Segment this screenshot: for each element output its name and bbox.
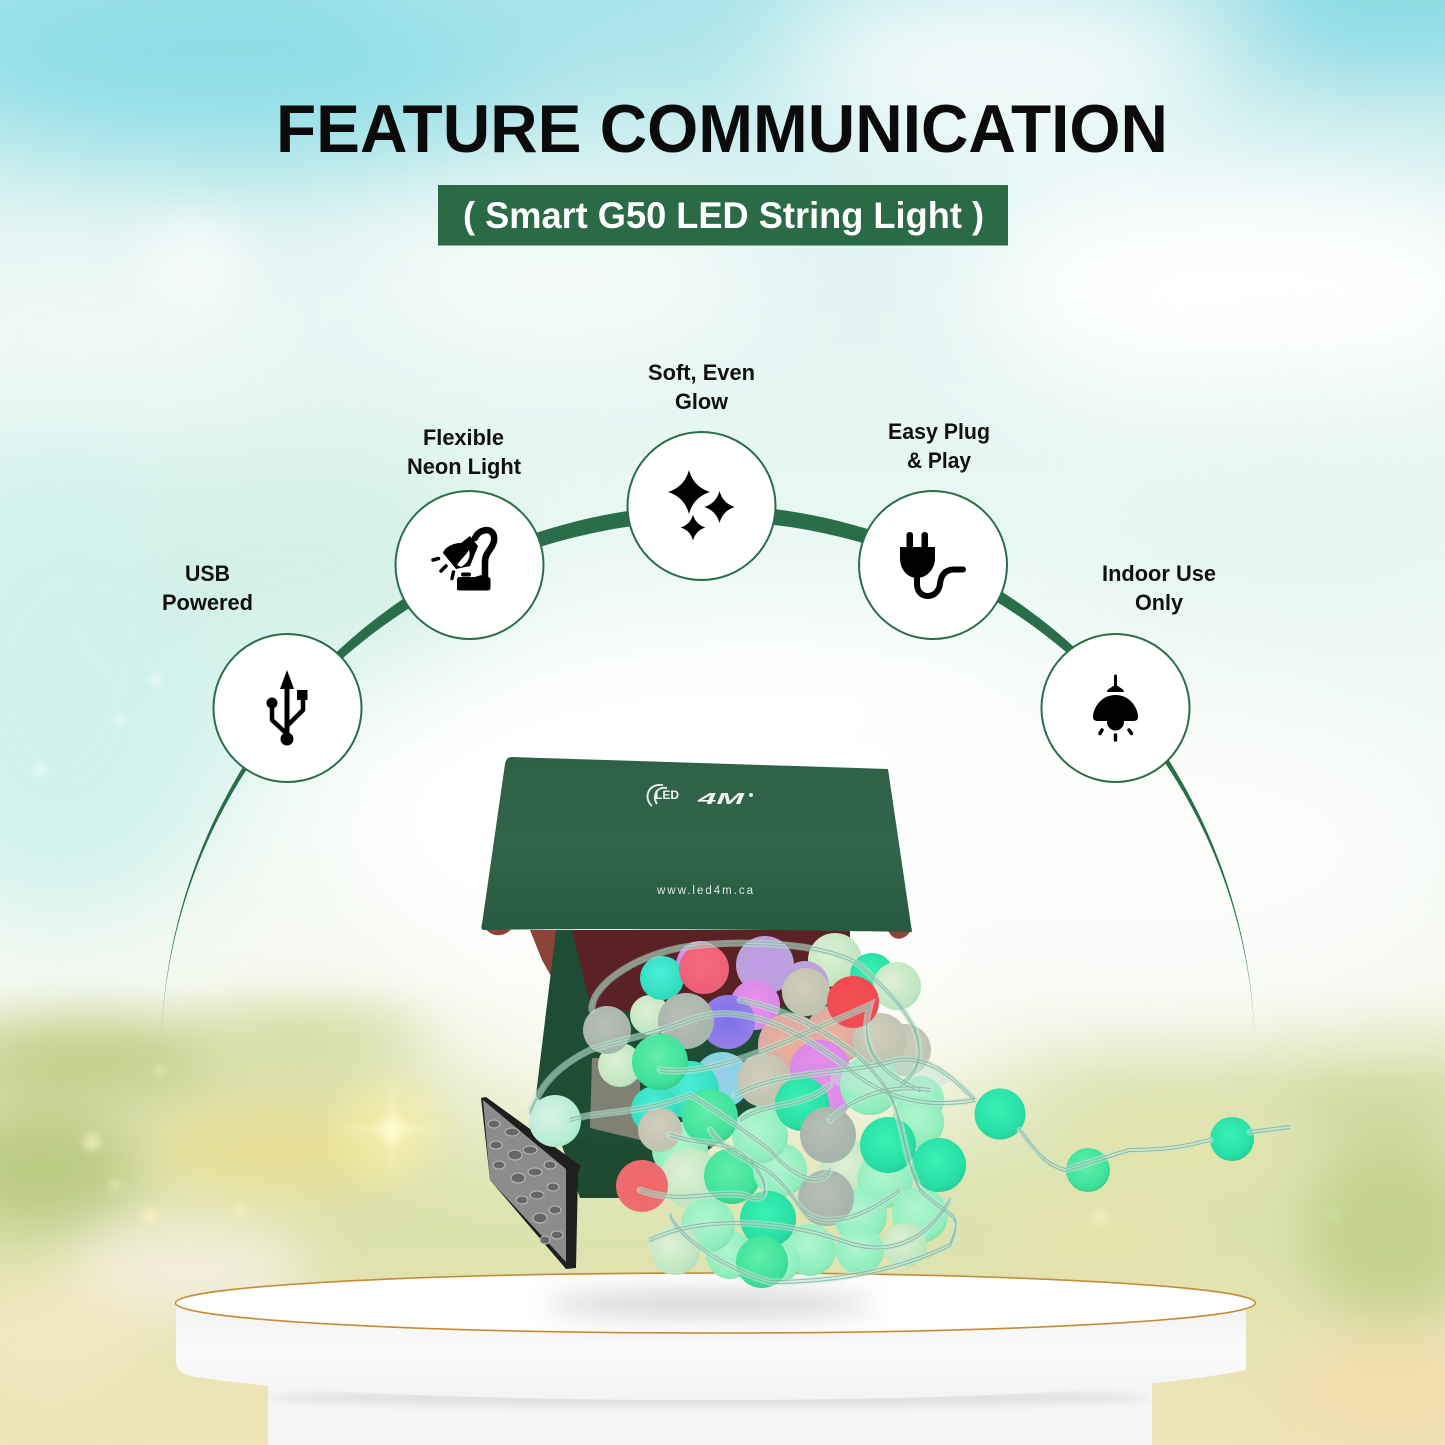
label: Soft, Even Glow — [648, 360, 755, 414]
feature: soft even glow — [628, 360, 776, 580]
shadow — [545, 1292, 875, 1316]
badge circle — [214, 634, 362, 782]
feature: easy plug and play — [859, 419, 1007, 639]
label: USB Powered: Powered — [162, 590, 253, 615]
label: Indoor Use Only: Only — [1135, 590, 1184, 615]
label: Indoor Use Only — [1102, 561, 1216, 615]
website on lid: www.led4m.ca — [656, 885, 754, 897]
badge circle — [396, 491, 544, 639]
front bulbs — [529, 944, 1254, 1288]
subtitle banner — [438, 185, 1008, 246]
label: Flexible Neon Light — [407, 425, 522, 479]
back bulbs — [598, 933, 948, 1282]
remote control — [481, 1097, 581, 1269]
badge circle — [628, 432, 776, 580]
label: USB Powered — [162, 561, 253, 615]
logo on lid: LED — [655, 788, 679, 802]
label: Soft, Even Glow: Soft, Even — [648, 360, 755, 385]
logo on lid — [648, 785, 753, 808]
feature: flexible neon light — [396, 425, 544, 639]
icon: usb — [266, 670, 308, 746]
label: Soft, Even Glow: Glow — [675, 389, 729, 414]
icon: desk lamp — [433, 530, 494, 590]
badge circle — [859, 491, 1007, 639]
product: box with string lights — [481, 757, 1290, 1288]
label: Flexible Neon Light: Neon Light — [407, 454, 522, 479]
box lid — [481, 757, 912, 939]
wires — [530, 942, 1290, 1284]
logo on lid: 4M — [696, 791, 745, 808]
label: Flexible Neon Light: Flexible — [423, 425, 504, 450]
arc connector — [161, 505, 1255, 1058]
box body — [530, 930, 850, 1198]
badge circle — [1042, 634, 1190, 782]
feature: indoor use only — [1042, 561, 1216, 782]
icon: sparkles — [668, 470, 735, 540]
feature: USB powered — [162, 561, 362, 782]
label: Easy Plug & Play — [888, 419, 990, 473]
lower tier — [268, 1380, 1152, 1445]
podium — [176, 1273, 1256, 1445]
title: FEATURE COMMUNICATION — [276, 91, 1168, 167]
icon: pendant lamp — [1093, 676, 1138, 740]
label: Easy Plug & Play: Easy Plug — [888, 419, 990, 444]
label: Indoor Use Only: Indoor Use — [1102, 561, 1216, 586]
upper tier — [176, 1302, 1246, 1400]
icon: plug — [900, 532, 963, 596]
top surface — [176, 1273, 1256, 1333]
label: USB Powered: USB — [185, 561, 230, 586]
label: Easy Plug & Play: & Play — [907, 448, 972, 473]
subtitle banner: ( Smart G50 LED String Light ) — [463, 195, 984, 236]
